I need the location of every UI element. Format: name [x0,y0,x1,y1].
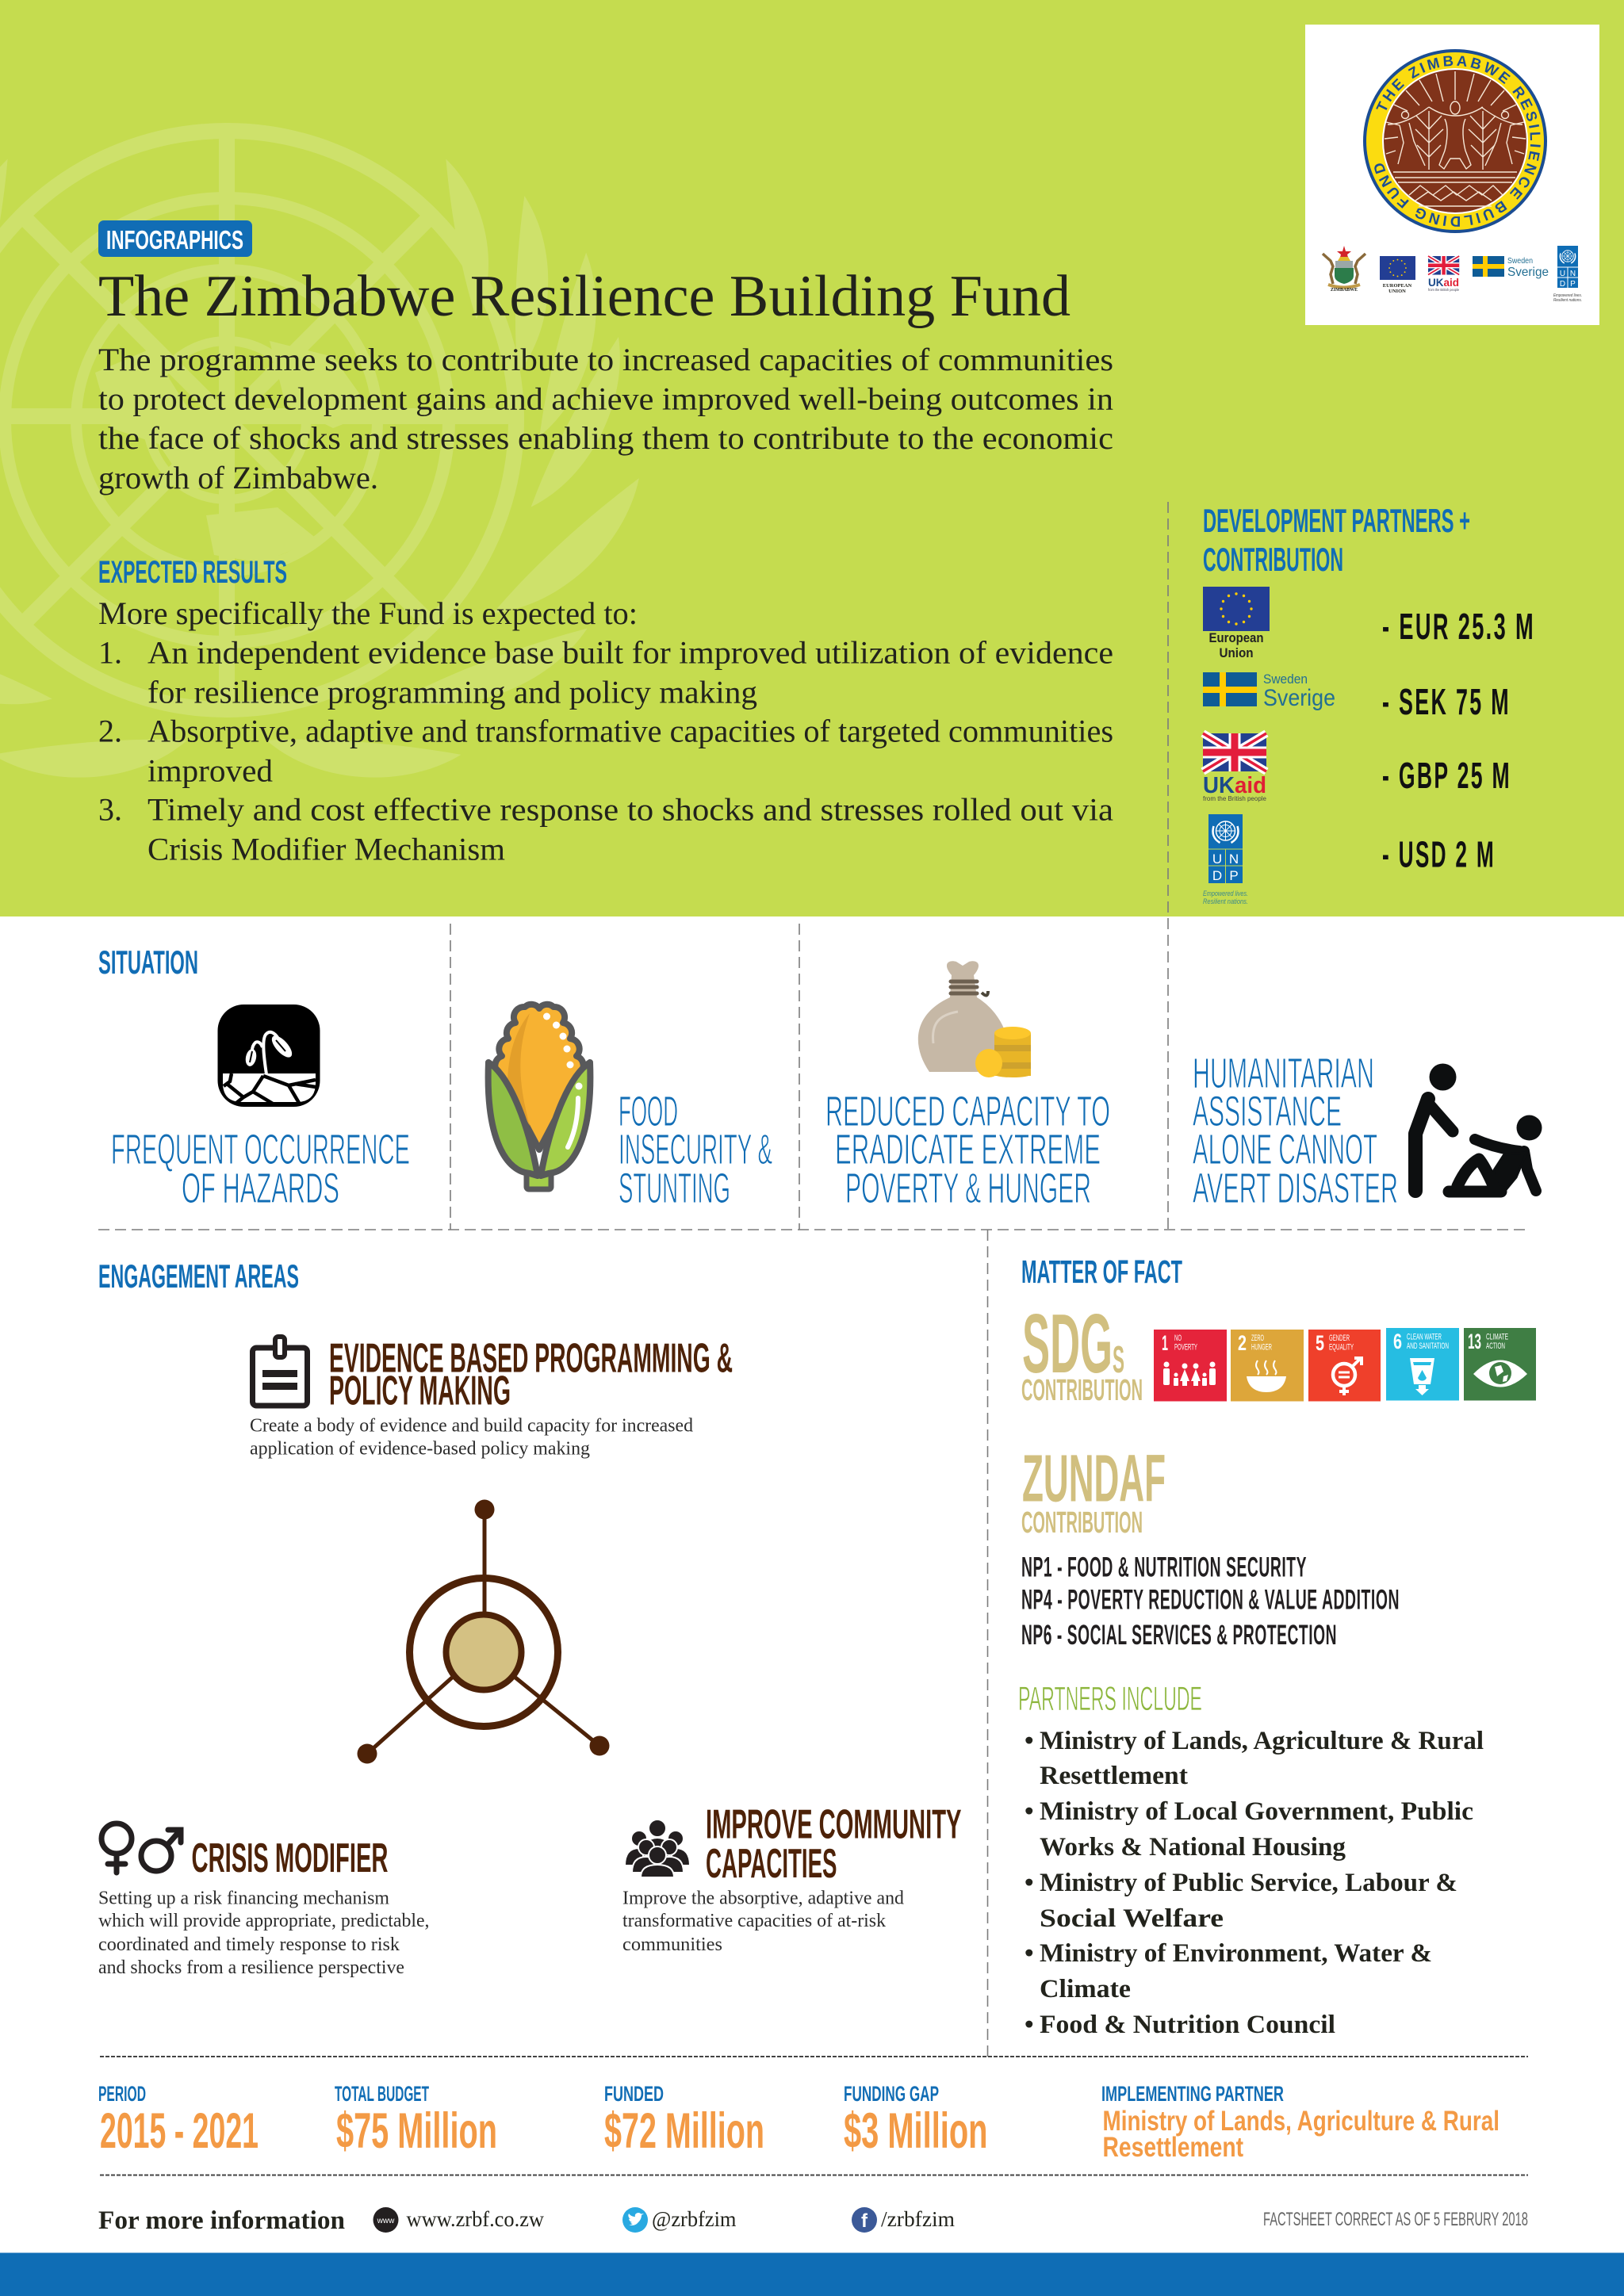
SDG tile 1: no poverty: POVERTY [1174,1343,1197,1353]
heading: development partners [1203,502,1470,578]
expected results: 3. [98,791,122,828]
list: partners: Works & National Housing [1040,1833,1346,1862]
list: partners: Ministry of Lands, Agriculture & Rural [1040,1727,1484,1755]
SDG tile 5: gender equality: EQUALITY [1329,1343,1354,1353]
logo: UK aid: UKaid [1428,276,1459,289]
stats: period: 2015 - 2021 [100,2103,259,2159]
text: community description: transformative capacities of at-risk [622,1910,887,1931]
list: partners: • [1025,2011,1034,2039]
heading: situation: SITUATION [98,943,198,981]
label: frequent occurrence of hazards: FREQUENT OCCURRENCE [111,1126,410,1173]
heading: development partners: CONTRIBUTION [1203,541,1343,578]
list: partners: Food & Nutrition Council [1040,2011,1335,2039]
SDG tile 1: no poverty: 1 [1162,1331,1168,1355]
logo: UNDP partner [1203,814,1248,905]
text: crisis description: which will provide appropriate, predictable, [98,1910,430,1931]
text: crisis description: and shocks from a resilience perspective [98,1957,404,1978]
logo: UNDP: N [1570,270,1576,278]
list: partners: Ministry of Local Government, Public [1040,1797,1473,1826]
situation item: reduced capacity [825,961,1110,1212]
label: humanitarian assistance: HUMANITARIAN [1193,1050,1374,1097]
heading: SDGs contribution: SDG [1022,1297,1113,1391]
engagement: evidence based programming [250,1335,733,1459]
text: community description [622,1887,904,1955]
logo: UNDP partner: P [1229,868,1239,883]
SDG tile 13: climate action [1464,1328,1536,1400]
programme description: The programme seeks to contribute to increased capacities of communities [98,342,1113,377]
heading: SDGs contribution [1021,1297,1143,1407]
list: partners: Social Welfare [1040,1904,1224,1933]
label: humanitarian assistance: ALONE CANNOT [1193,1126,1377,1173]
label: food insecurity and stunting: STUNTING [619,1165,730,1212]
label: food insecurity and stunting [619,1088,772,1212]
diagram: hub with three spokes [357,1500,609,1763]
logo panel [1305,25,1599,325]
logo: Sweden: Sverige [1507,266,1549,279]
logo: UK aid partner: UKaid [1203,773,1266,798]
icon: gender symbols [102,1823,181,1873]
stats: funded: $72 Million [604,2103,764,2159]
heading: engagement areas: ENGAGEMENT AREAS [98,1257,299,1295]
stats: period: PERIOD [98,2082,146,2106]
expected results: 1. [98,634,122,671]
logo: European Union partner: European [1208,630,1264,645]
text: twitter handle: @zrbfzim [652,2207,736,2231]
badge: infographics: INFOGRAPHICS [106,225,243,254]
logo: UK aid partner: from the British people [1203,794,1266,802]
heading: ZUNDAF contribution [1021,1441,1166,1540]
logo: Zimbabwe arms: ZIMBABWE [1331,288,1358,293]
list: national priorities [1021,1552,1400,1651]
logo: Sweden partner: Sweden [1263,672,1308,687]
list: partners: Ministry of Environment, Water & [1040,1939,1432,1968]
logo: UK aid [1428,256,1459,292]
footer: contact [98,2206,1528,2235]
icon: person helping another person [1415,1064,1542,1196]
situation item: food insecurity [488,1004,772,1212]
icon: drought seedling [217,1004,320,1107]
icon: money bag and coins [918,961,1031,1077]
list: partners: • [1025,1939,1034,1968]
text: facebook handle: /zrbfzim [881,2207,955,2231]
logo: UNDP: Empowered lives. [1553,293,1582,298]
text: crisis description [98,1887,430,1978]
expected results: 2. [98,714,122,748]
SDG tile 2: zero hunger: ZERO [1251,1334,1264,1343]
text: community description: communities [622,1934,722,1955]
icon: website: www [377,2217,395,2225]
emblem: resilience fund seal: THE ZIMBABWE RESILIENCE BUILDING FUND [1374,55,1541,227]
stats: funding gap: $3 Million [844,2103,988,2159]
stats: funding gap [844,2082,988,2159]
text: evidence description [250,1414,693,1459]
amount: SEK: - SEK 75 M [1382,681,1511,722]
label: food insecurity and stunting: INSECURITY & [619,1126,772,1173]
list: partners: • [1025,1797,1034,1826]
expected results: Crisis Modifier Mechanism [147,831,505,867]
label: frequent occurrence of hazards [111,1126,410,1212]
stats: implementing partner: Resettlement [1102,2132,1243,2163]
label: food insecurity and stunting: FOOD [619,1088,678,1135]
heading: evidence based programming and policy making [329,1335,733,1414]
logo: Zimbabwe arms [1323,246,1365,293]
expected results: An independent evidence base built for improved utilization of evidence [147,634,1113,671]
SDG tile 1: no poverty: NO [1174,1334,1182,1343]
SDG tile 2: zero hunger [1231,1330,1304,1402]
SDG tile 13: climate action: ACTION [1486,1341,1505,1351]
label: humanitarian assistance: AVERT DISASTER [1193,1165,1398,1212]
stats: funding gap: FUNDING GAP [844,2082,939,2106]
stats: total budget: TOTAL BUDGET [335,2082,429,2106]
panel: matter of fact [1018,1253,1536,2039]
SDG tile 2: zero hunger: 2 [1238,1331,1247,1355]
SDG tile 5: gender equality: 5 [1316,1331,1324,1355]
SDG tile 1: no poverty [1154,1330,1227,1402]
icon: facebook: f [861,2210,868,2232]
text: evidence description: application of evidence-based policy making [250,1438,590,1459]
label: reduced capacity [825,1088,1110,1212]
logo: Sweden [1473,256,1549,279]
heading: evidence based programming and policy making: POLICY MAKING [329,1368,511,1414]
heading: SDGs contribution: CONTRIBUTION [1021,1374,1143,1407]
logo: European Union partner: Union [1220,645,1253,660]
logo: Sweden: Sweden [1507,257,1533,266]
logo: UNDP: U [1560,270,1565,278]
icon: corn cob [488,1004,590,1189]
heading: evidence based programming and policy making: EVIDENCE BASED PROGRAMMING & [329,1335,733,1381]
heading: improve community capacities [706,1801,961,1887]
list: national priorities: NP6 - SOCIAL SERVICES & PROTECTION [1021,1620,1337,1651]
title: The Zimbabwe Resilience Building Fund [98,264,1071,329]
SDG tile 13: climate action: CLIMATE [1486,1332,1508,1341]
logo: European Union [1380,256,1415,294]
logo: UNDP partner: N [1229,851,1239,867]
label: reduced capacity: REDUCED CAPACITY TO [825,1088,1110,1135]
SDG tile 2: zero hunger: HUNGER [1251,1343,1272,1353]
stats: total budget: $75 Million [336,2103,497,2159]
expected results: Absorptive, adaptive and transformative capacities of targeted communities [147,714,1113,748]
logo: UNDP: D [1560,280,1565,289]
stats: total budget [335,2082,497,2159]
SDG tile 6: clean water and sanitation: CLEAN WATER [1407,1332,1442,1341]
SDG tile 6: clean water and sanitation: AND SANITATION [1407,1341,1449,1351]
stats: implementing partner: Ministry of Lands, Agriculture & Rural [1102,2106,1500,2137]
heading: ZUNDAF contribution: CONTRIBUTION [1021,1506,1143,1540]
label: humanitarian assistance: ASSISTANCE [1193,1088,1342,1135]
logo: UNDP: P [1570,280,1576,289]
expected results [98,555,1113,867]
expected results: for resilience programming and policy making [147,674,757,710]
heading: matter of fact: MATTER OF FACT [1021,1253,1182,1290]
text: website: www.zrbf.co.zw [406,2207,544,2231]
expected results: More specifically the Fund is expected to: [98,595,638,631]
expected results: improved [147,753,273,788]
text: evidence description: Create a body of evidence and build capacity for increased [250,1414,693,1437]
engagement: improve community capacities [622,1801,961,1955]
UN emblem watermark [0,131,649,841]
programme description: growth of Zimbabwe. [98,460,378,496]
logo: UNDP partner: D [1212,868,1222,883]
heading: ZUNDAF contribution: ZUNDAF [1022,1441,1166,1516]
SDG tile 6: clean water and sanitation [1386,1328,1459,1400]
amount: USD: - USD 2 M [1382,834,1496,875]
badge: infographics [98,220,252,257]
icon: website [373,2207,398,2233]
programme description: to protect development gains and achieve improved well-being outcomes in [98,381,1113,417]
text: community description: Improve the absorptive, adaptive and [622,1887,904,1909]
logo: UNDP partner: Empowered lives. [1203,890,1248,897]
logo: European Union: EUROPEAN [1383,283,1412,289]
icon: group of people [625,1820,690,1877]
expected results: EXPECTED RESULTS [98,555,287,590]
amount: GBP: - GBP 25 M [1382,755,1511,796]
icon: clipboard [252,1337,308,1406]
text: crisis description: Setting up a risk financing mechanism [98,1887,389,1909]
label: reduced capacity: ERADICATE EXTREME [835,1126,1101,1173]
logo: UNDP [1553,246,1582,303]
list: national priorities: NP1 - FOOD & NUTRITION SECURITY [1021,1552,1307,1582]
logo: European Union: UNION [1388,289,1406,294]
text: for more information: For more information [98,2206,345,2235]
list: partners [1025,1727,1484,2039]
logo: UK aid: from the British people [1428,288,1459,292]
logo: UK aid partner [1203,733,1266,802]
programme description: the face of shocks and stresses enabling them to contribute to the economic [98,420,1113,456]
logo: UNDP partner: Resilient nations. [1203,897,1248,905]
heading: partners include: PARTNERS INCLUDE [1018,1680,1202,1718]
label: reduced capacity: POVERTY & HUNGER [845,1165,1091,1212]
SDG tile 5: gender equality [1308,1330,1381,1402]
logo: European Union partner [1203,587,1270,660]
situation item: hazards [111,1004,410,1212]
stats: implementing partner [1101,2082,1500,2163]
icon: twitter [622,2207,648,2233]
SDG tile 5: gender equality: GENDER [1329,1334,1350,1343]
list: partners: Ministry of Public Service, Labour & [1040,1869,1457,1897]
footer band [0,2253,1624,2296]
SDG tile 13: climate action: 13 [1468,1330,1481,1353]
green header background [0,0,1624,916]
programme description [98,342,1113,496]
icon: facebook [852,2207,877,2233]
situation item: humanitarian assistance [1193,1050,1542,1212]
panel: development partners and contribution [1203,502,1535,905]
SDG tile 6: clean water and sanitation: 6 [1393,1330,1402,1353]
heading: improve community capacities: CAPACITIES [706,1841,837,1887]
stats: period [98,2082,259,2159]
list: partners: • [1025,1869,1034,1897]
heading: SDGs contribution: S [1113,1339,1124,1381]
logo: UNDP partner: U [1212,851,1222,867]
logo: UNDP: Resilient nations. [1553,298,1582,303]
logo: Sweden partner: Sverige [1263,685,1335,711]
engagement: crisis modifier [98,1823,430,1978]
heading: crisis modifier: CRISIS MODIFIER [192,1835,389,1881]
stats: funded: FUNDED [604,2082,664,2106]
heading: improve community capacities: IMPROVE COMMUNITY [706,1801,961,1847]
list: partners: • [1025,1727,1034,1755]
logo: Sweden partner [1203,672,1335,711]
stats: funded [604,2082,764,2159]
label: humanitarian assistance [1193,1050,1398,1212]
list: partners: Climate [1040,1975,1131,2003]
list: partners: Resettlement [1040,1762,1188,1790]
expected results: Timely and cost effective response to shocks and stresses rolled out via [147,791,1113,828]
stats: implementing partner: IMPLEMENTING PARTNER [1101,2082,1284,2106]
label: frequent occurrence of hazards: OF HAZARDS [182,1165,339,1212]
text: crisis description: coordinated and timely response to risk [98,1934,400,1955]
